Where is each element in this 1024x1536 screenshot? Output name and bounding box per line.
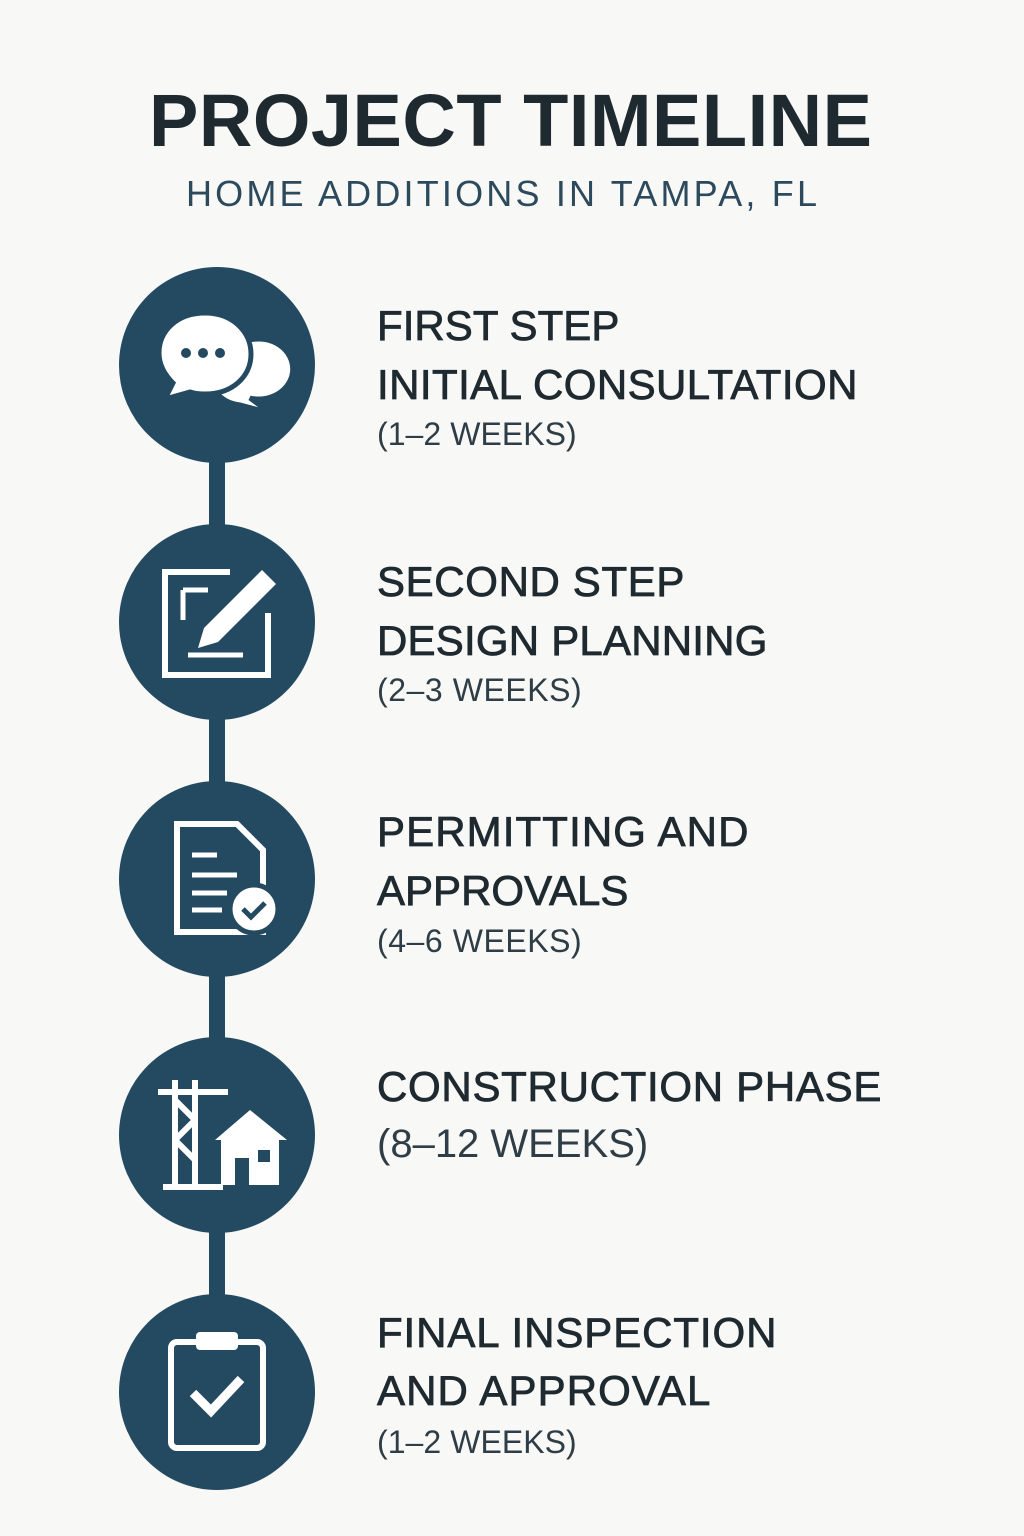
step 1 text: (1–2 WEEKS) xyxy=(377,416,577,452)
step 2 text: SECOND STEP xyxy=(377,558,685,605)
step 5 icon: clipboard check xyxy=(119,1294,315,1490)
step 3 text: PERMITTING AND xyxy=(377,808,749,855)
step 2 text: (2–3 WEEKS) xyxy=(377,672,582,708)
step 3 icon: document with check xyxy=(119,781,315,977)
step 2 icon: design plan xyxy=(119,524,315,720)
step 3 text xyxy=(377,808,749,959)
step 3 text: APPROVALS xyxy=(377,867,629,914)
step 5 text xyxy=(377,1309,777,1460)
step 1 text xyxy=(377,302,858,452)
step 4 text xyxy=(377,1063,882,1166)
subtitle: HOME ADDITIONS IN TAMPA, FL xyxy=(186,173,820,214)
connector line xyxy=(209,365,225,1392)
step 1 text: INITIAL CONSULTATION xyxy=(377,361,858,408)
step 4 text: (8–12 WEEKS) xyxy=(377,1122,648,1166)
step 5 text: FINAL INSPECTION xyxy=(377,1309,777,1356)
step 3 text: (4–6 WEEKS) xyxy=(377,923,582,959)
step 1 icon: chat bubbles xyxy=(119,267,315,463)
step 1 text: FIRST STEP xyxy=(377,302,620,349)
step 2 text: DESIGN PLANNING xyxy=(377,617,768,664)
step 5 text: (1–2 WEEKS) xyxy=(377,1424,577,1460)
title: PROJECT TIMELINE xyxy=(149,79,875,162)
step 5 text: AND APPROVAL xyxy=(377,1367,711,1414)
step 2 text xyxy=(377,558,768,708)
step 4 text: CONSTRUCTION PHASE xyxy=(377,1063,882,1110)
step 4 icon: crane and house xyxy=(119,1037,315,1233)
